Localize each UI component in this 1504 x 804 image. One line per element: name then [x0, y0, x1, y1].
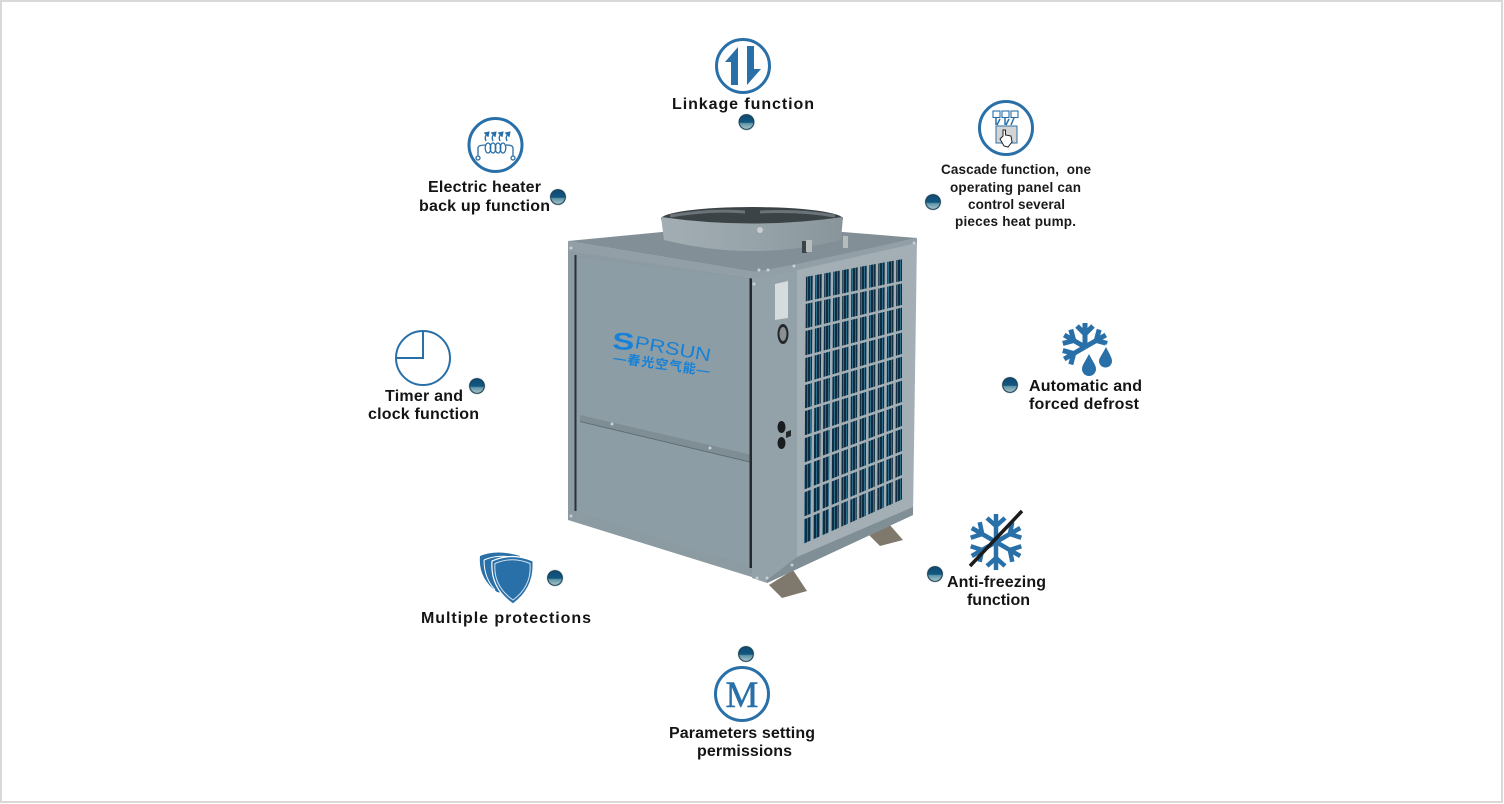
icon: shields [480, 552, 533, 604]
screws [570, 242, 916, 580]
label: electric heater [419, 179, 550, 215]
feet [769, 524, 903, 598]
feature: cascade function [924, 102, 1091, 229]
icon: linkage arrows [716, 40, 770, 92]
label: cascade function: operating panel can [950, 180, 1081, 195]
label: parameters setting: Parameters setting [669, 725, 815, 742]
label: linkage function: Linkage function [672, 96, 814, 113]
rating label [775, 281, 788, 320]
feature: timer and clock [368, 331, 486, 423]
label: cascade function: control several [968, 197, 1065, 212]
gauge badge [778, 324, 788, 344]
bullet [926, 565, 944, 583]
feature: electric heater [419, 118, 567, 215]
label: timer and clock [368, 388, 479, 423]
bullet [549, 188, 567, 206]
icon: M circle [716, 668, 768, 720]
icon: cascade panel [980, 102, 1032, 154]
label: anti-freezing: function [967, 592, 1030, 609]
fan shroud [661, 207, 848, 253]
water connectors [778, 421, 791, 449]
icon: M circle: M [726, 675, 758, 716]
label: electric heater: Electric heater [428, 179, 541, 196]
label: timer and clock: clock function [368, 406, 479, 423]
label: anti-freezing [947, 574, 1046, 609]
brand logo: S [612, 328, 635, 356]
bullet [737, 645, 755, 663]
product: heat pump unit [568, 207, 917, 598]
label: automatic defrost: forced defrost [1029, 396, 1140, 413]
feature: anti-freezing [926, 511, 1046, 609]
bullet [738, 113, 755, 131]
label: multiple protections: Multiple protections [421, 610, 591, 627]
feature: multiple protections [421, 552, 591, 627]
label: anti-freezing: Anti-freezing [947, 574, 1046, 591]
top cover [568, 232, 917, 272]
bullet [546, 569, 564, 587]
icon: heating coil [469, 118, 522, 172]
bullet [924, 193, 942, 211]
label: cascade function: pieces heat pump. [955, 214, 1076, 229]
feature: parameters setting [669, 645, 815, 760]
brand logo [612, 328, 713, 378]
bullet [1001, 376, 1019, 394]
label: automatic defrost: Automatic and [1029, 378, 1142, 395]
coil grid [803, 258, 903, 545]
feature: automatic defrost [1001, 323, 1142, 413]
label: parameters setting [669, 725, 815, 760]
label: parameters setting: permissions [697, 743, 792, 760]
icon: snowflake with drops [1060, 323, 1112, 376]
panel divider [580, 415, 752, 462]
left face [568, 241, 755, 578]
label: timer and clock: Timer and [385, 388, 463, 405]
top edge band [568, 238, 917, 279]
corner pillar [752, 266, 797, 583]
right side frame [797, 238, 917, 569]
feature: linkage function [672, 40, 814, 131]
label: automatic defrost [1029, 378, 1142, 413]
brand logo: —春光空气能— [613, 350, 711, 378]
icon: crossed snowflake [967, 511, 1025, 570]
label: cascade function: Cascade function, one [941, 162, 1091, 177]
label: electric heater: back up function [419, 198, 550, 215]
label: cascade function [941, 162, 1091, 229]
brand logo: PRSUN [633, 332, 713, 365]
bullet [468, 377, 486, 395]
icon: clock [396, 331, 450, 385]
